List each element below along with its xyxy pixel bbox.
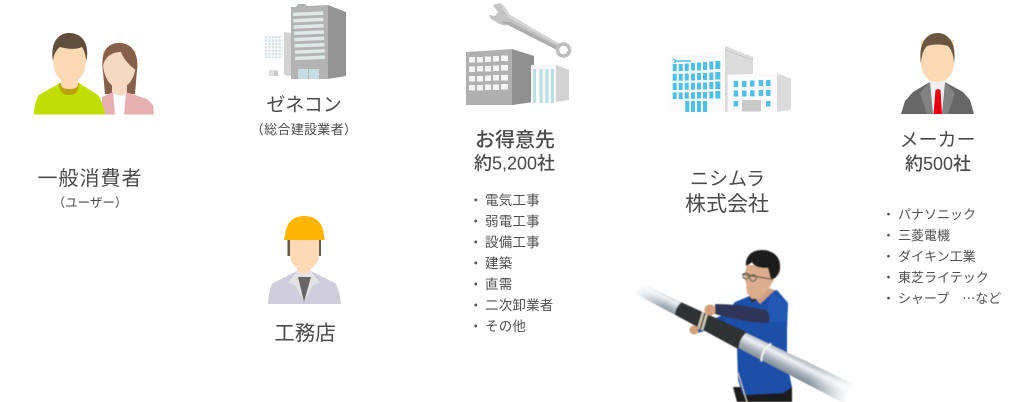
icon: manufacturer businessman	[901, 33, 974, 114]
list: customer types	[469, 193, 554, 334]
list: customer types: ・	[469, 235, 483, 250]
heading: general contractor: ゼネコン	[266, 94, 342, 116]
heading: customers: お得意先	[475, 128, 555, 152]
photo: worker wrapping a pipe	[631, 250, 858, 402]
heading: general contractor	[251, 94, 357, 137]
icon: couple of consumers	[34, 33, 154, 114]
icon: wrench and customer building	[466, 3, 570, 105]
list: customer types: 直需	[485, 277, 512, 292]
heading: consumers: 一般消費者	[38, 167, 142, 190]
list: manufacturers: ・	[882, 249, 895, 264]
list: customer types: 電気工事	[485, 193, 540, 208]
heading: customers	[474, 128, 555, 174]
list: customer types: 弱電工事	[485, 214, 540, 229]
list: manufacturers: シャープ …など	[898, 288, 1001, 307]
list: customer types: ・	[469, 214, 483, 229]
list: customer types: ・	[469, 298, 483, 313]
list: customer types: ・	[469, 193, 483, 208]
heading: consumers	[38, 167, 142, 210]
list: customer types: 二次卸業者	[485, 298, 554, 313]
list: customer types: その他	[485, 319, 526, 334]
list: manufacturers: ・	[882, 228, 895, 243]
icon: general contractor building	[265, 4, 346, 79]
list: manufacturers: ・	[882, 291, 895, 306]
list: manufacturers	[882, 207, 1001, 307]
heading: customers: 約5,200社	[474, 154, 555, 174]
list: customer types: ・	[469, 319, 483, 334]
list: manufacturers: パナソニック	[898, 207, 976, 222]
list: manufacturers: ・	[882, 270, 895, 285]
heading: manufacturers	[899, 130, 976, 174]
list: manufacturers: 三菱電機	[898, 228, 950, 243]
heading: general contractor: （総合建設業者）	[251, 122, 357, 137]
heading: Nishimura: 株式会社	[685, 193, 769, 216]
icon: Nishimura buildings	[668, 46, 791, 112]
list: manufacturers: ・	[882, 207, 895, 222]
list: customer types: ・	[469, 277, 483, 292]
list: customer types: 設備工事	[485, 235, 540, 250]
heading: consumers: （ユーザー）	[53, 196, 127, 210]
icon: construction worker	[268, 216, 341, 304]
list: manufacturers: ダイキン工業	[898, 249, 976, 264]
list: customer types: 建築	[485, 256, 513, 271]
list: manufacturers: 東芝ライテック	[898, 270, 989, 285]
heading: manufacturers: 約500社	[905, 154, 971, 174]
list: customer types: ・	[469, 256, 483, 271]
heading: contractor shop: 工務店	[274, 322, 336, 345]
heading: Nishimura	[685, 169, 769, 216]
heading: Nishimura: ニシムラ	[690, 169, 765, 190]
heading: manufacturers: メーカー	[899, 130, 976, 151]
